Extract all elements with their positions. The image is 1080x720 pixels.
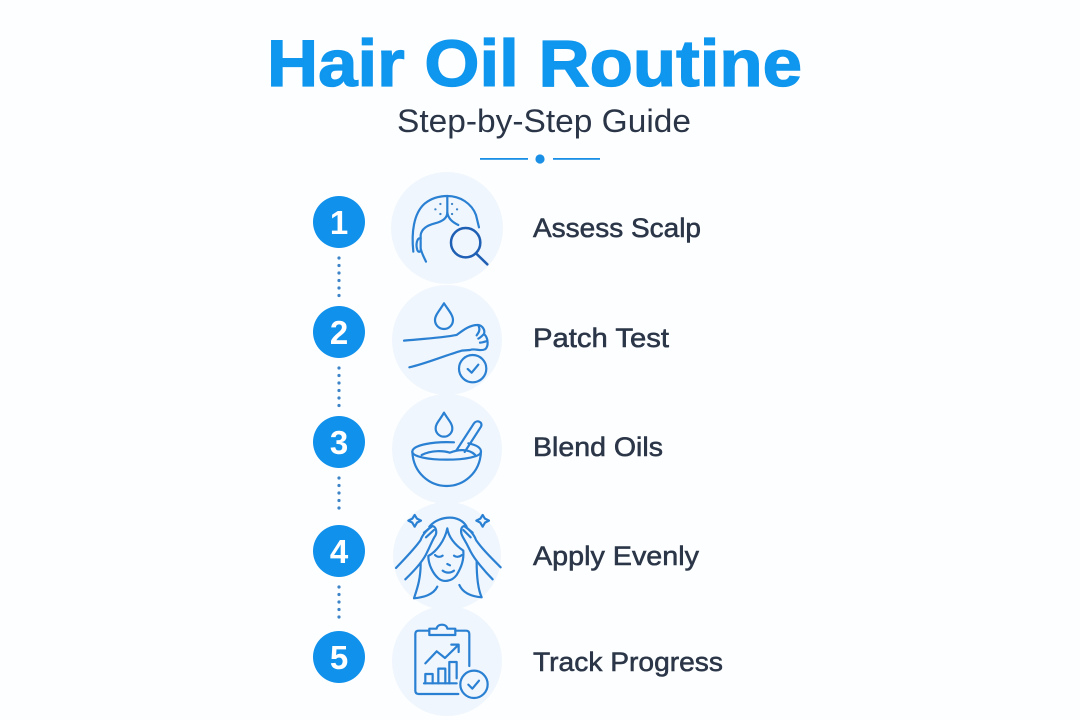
subtitle: Step-by-Step Guide <box>397 103 691 139</box>
step 2: patch test <box>313 285 670 407</box>
step 2 label: Patch Test <box>533 323 670 353</box>
step 5: track progress <box>313 606 723 716</box>
step 5 label: Track Progress <box>533 647 723 677</box>
connector 3 to 4 <box>337 478 341 515</box>
title divider <box>480 154 600 164</box>
step 3 badge <box>313 416 365 468</box>
step 5 badge <box>313 631 365 683</box>
icon: head with magnifier <box>413 196 487 264</box>
step 3 badge: 3 <box>330 424 348 461</box>
step 1: assess scalp <box>313 172 701 297</box>
step 1 badge <box>313 196 365 248</box>
icon: mixing bowl with drop <box>412 413 481 486</box>
title: Hair Oil Routine <box>267 26 802 100</box>
icon: woman massaging scalp <box>396 515 501 598</box>
step 5 badge: 5 <box>330 639 348 676</box>
step 2 badge: 2 <box>330 314 348 351</box>
step 2 badge <box>313 306 365 358</box>
step 1 label: Assess Scalp <box>533 213 701 243</box>
step 3 icon backdrop <box>392 394 502 504</box>
connector 2 to 3 <box>337 368 341 407</box>
icon: clipboard with chart and check <box>415 625 488 698</box>
step 1 icon backdrop <box>391 172 503 284</box>
icon: arm with drop and check <box>404 303 488 382</box>
step 5 icon backdrop <box>392 606 502 716</box>
connector 1 to 2 <box>337 258 341 297</box>
step 4: apply evenly <box>313 502 700 622</box>
step 3: blend oils <box>313 394 663 515</box>
step 1 badge: 1 <box>330 204 348 241</box>
step 2 icon backdrop <box>392 285 502 395</box>
step 4 label: Apply Evenly <box>533 541 700 571</box>
step 3 label: Blend Oils <box>533 432 663 462</box>
step 4 badge <box>313 525 365 577</box>
step 4 icon backdrop <box>393 502 501 610</box>
step 4 badge: 4 <box>330 533 349 570</box>
connector 4 to 5 <box>337 587 341 622</box>
